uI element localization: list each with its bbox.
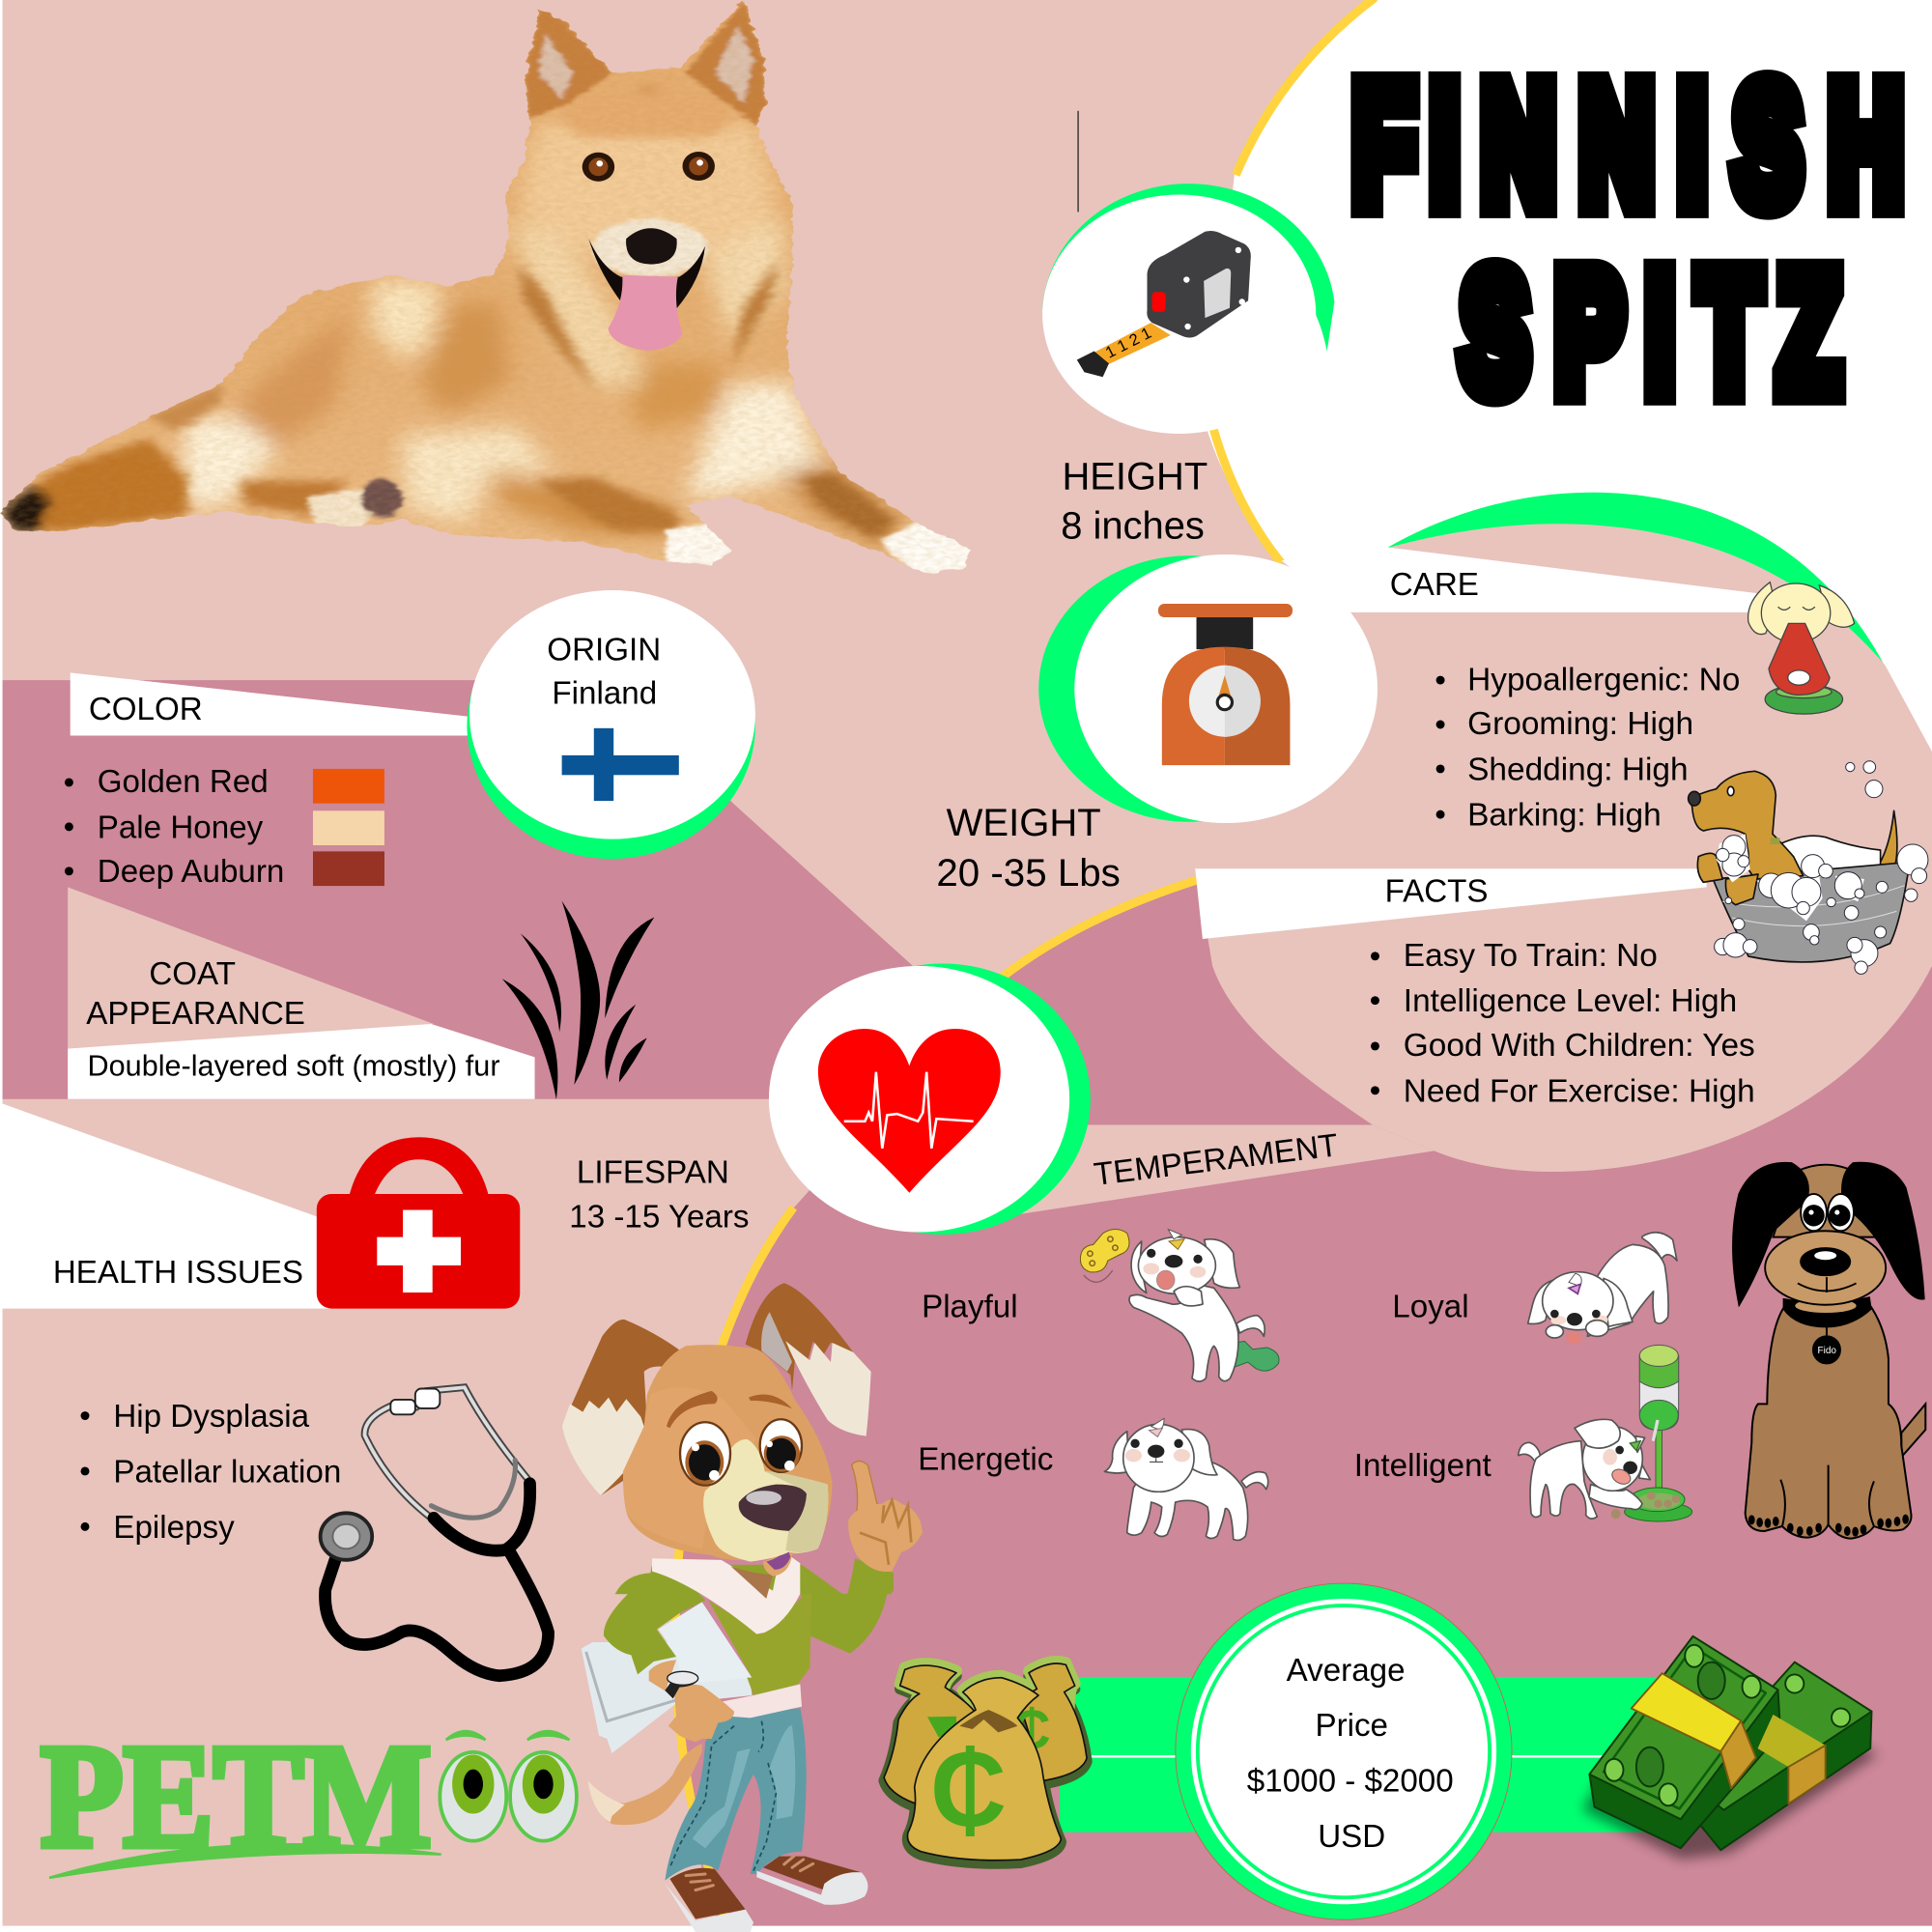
list: care: Barking: High	[1467, 798, 1662, 834]
divider: thin vertical line	[1077, 111, 1079, 212]
band: care	[1282, 547, 1762, 612]
illustration: sitting brown dog: Fido	[1818, 1346, 1836, 1356]
label: temperament: TEMPERAMENT	[1092, 1127, 1340, 1193]
illustration: dog in bath tub	[1689, 761, 1928, 974]
illustration: cartoon dog mascot	[562, 1283, 923, 1932]
list: colors: Golden Red	[98, 764, 269, 800]
title: SPITZ	[1461, 237, 1840, 427]
label: energetic: Energetic	[918, 1442, 1053, 1478]
illustration: playful puppy	[1080, 1230, 1279, 1381]
band: color	[71, 672, 474, 735]
label: intelligent: Intelligent	[1354, 1448, 1492, 1484]
band: coat appearance	[68, 887, 434, 1048]
illustration: sitting brown dog	[1733, 1163, 1925, 1539]
icon: heart circle	[769, 963, 1091, 1235]
title: FINNISH	[1353, 50, 1903, 240]
list: facts: Need For Exercise: High	[1404, 1073, 1755, 1109]
list: colors	[65, 764, 284, 890]
arc: yellow middle	[1001, 880, 1198, 979]
label: weight: 20 -35 Lbs	[936, 851, 1121, 895]
heading: coat appearance	[86, 956, 305, 1032]
heading: coat appearance: APPEARANCE	[86, 996, 305, 1032]
heading: care: CARE	[1390, 567, 1479, 603]
icon: tape measure circle	[1042, 184, 1334, 434]
label: weight: WEIGHT	[947, 802, 1101, 844]
band: facts	[1195, 868, 1707, 939]
text: coat description: Double-layered soft (mostly) fur	[88, 1050, 500, 1083]
panel: average price: USD	[1318, 1819, 1385, 1855]
arc: yellow lower title edge	[1212, 425, 1282, 563]
label: weight	[936, 802, 1121, 895]
list: colors: Pale Honey	[98, 810, 264, 845]
label: lifespan: LIFESPAN	[577, 1154, 729, 1190]
heading: color: COLOR	[89, 692, 203, 727]
list: care: Shedding: High	[1467, 752, 1689, 787]
list: care: Grooming: High	[1467, 706, 1693, 742]
panel: average price: Price	[1315, 1708, 1388, 1744]
icon: weighing scale circle	[1038, 554, 1378, 823]
illustration: intelligent puppy with feeder	[1519, 1345, 1692, 1521]
illustration: money bags: ₵	[930, 1730, 1007, 1849]
list: facts	[1371, 938, 1755, 1109]
label: height: HEIGHT	[1062, 455, 1208, 497]
icon: stethoscope	[321, 1387, 549, 1676]
panel: title area white	[1208, 0, 1932, 764]
illustration: energetic puppy	[1104, 1418, 1268, 1540]
illustration: money bags: ₵	[1011, 1700, 1051, 1761]
band: temperament	[1015, 1125, 1435, 1215]
panel: average price: $1000 - $2000	[1247, 1764, 1454, 1800]
panel: mauve color and coat	[0, 680, 914, 1099]
logo: petmoo: PETM	[41, 1716, 431, 1879]
icon: origin circle with flag: Finland	[552, 675, 657, 711]
list: care: Hypoallergenic: No	[1467, 662, 1740, 697]
illustration: puppy eating meat	[1748, 582, 1855, 714]
list: facts: Easy To Train: No	[1404, 938, 1658, 974]
icon: origin circle with flag: ORIGIN	[547, 633, 661, 668]
swatches	[313, 769, 384, 886]
list: health issues: Hip Dysplasia	[113, 1399, 310, 1435]
icon: tape measure circle: 1 1 2 1	[1102, 324, 1154, 362]
label: lifespan: 13 -15 Years	[569, 1199, 749, 1235]
arc: green care crescent	[1386, 493, 1888, 671]
list: health issues: Epilepsy	[113, 1510, 235, 1546]
band: coat description	[68, 1024, 535, 1099]
heading: coat appearance: COAT	[149, 956, 236, 992]
icon: first aid kit	[317, 1137, 520, 1309]
heading: health issues: HEALTH ISSUES	[53, 1255, 303, 1291]
label: height: 8 inches	[1061, 504, 1205, 547]
panel: average price	[1060, 1583, 1663, 1919]
list: facts: Intelligence Level: High	[1404, 983, 1737, 1019]
icon: origin circle with flag	[467, 590, 755, 859]
panel: mauve lower right	[673, 877, 1932, 1932]
icon: fur tuft	[502, 901, 654, 1099]
label: height	[1061, 455, 1208, 547]
illustration: money bags	[884, 1662, 1087, 1863]
panel: average price: Average	[1287, 1653, 1406, 1689]
label: loyal: Loyal	[1392, 1290, 1469, 1325]
illustration: loyal puppy	[1528, 1233, 1677, 1345]
panel: care and facts circle	[1198, 524, 1932, 1172]
list: facts: Good With Children: Yes	[1404, 1028, 1755, 1064]
heading: facts: FACTS	[1385, 874, 1489, 910]
title	[1353, 50, 1903, 427]
arc: yellow lower	[675, 1208, 793, 1922]
band: health issues	[0, 1103, 332, 1309]
list: colors: Deep Auburn	[98, 854, 284, 890]
list: care	[1436, 662, 1740, 834]
list: health issues	[81, 1399, 341, 1546]
illustration: stacks of cash	[1582, 1636, 1878, 1860]
label: playful: Playful	[922, 1290, 1018, 1325]
photo: finnish spitz dog	[0, 0, 983, 581]
arc: yellow title edge	[1236, 0, 1375, 175]
list: health issues: Patellar luxation	[113, 1454, 341, 1490]
label: lifespan	[569, 1154, 749, 1235]
